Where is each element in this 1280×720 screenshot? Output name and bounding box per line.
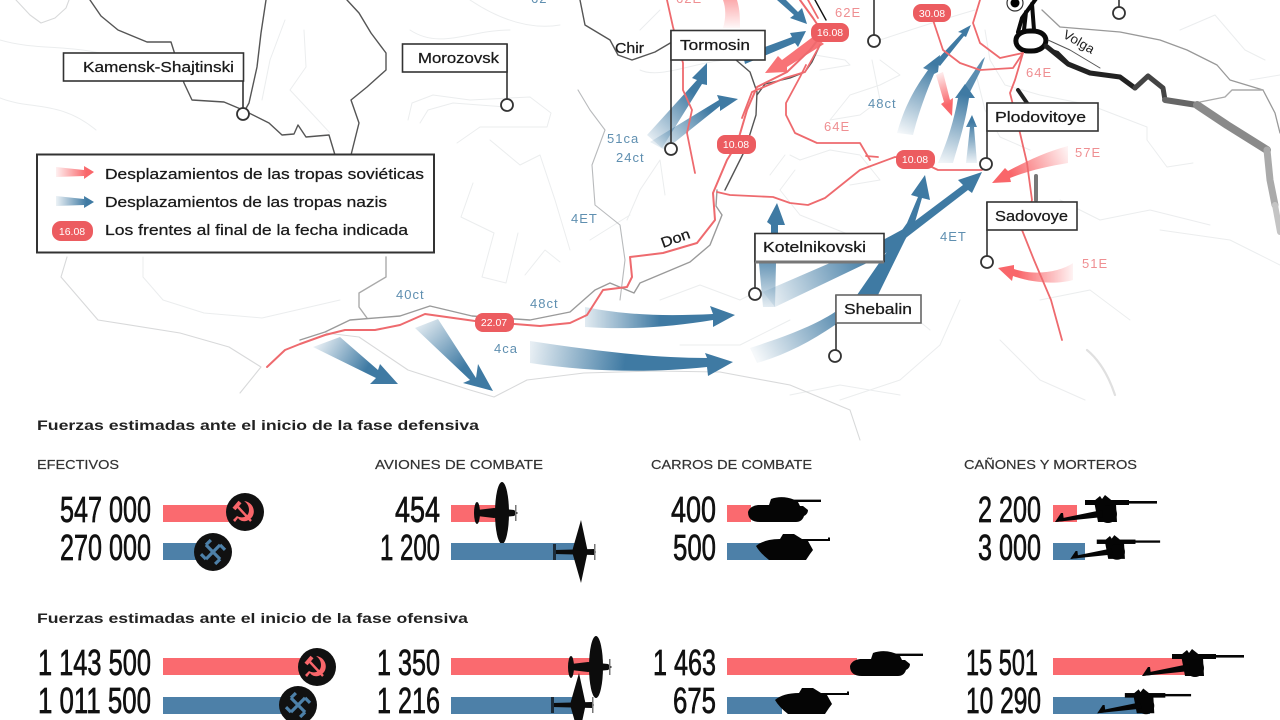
river name: Volga: Volga [1060, 27, 1098, 57]
unit labels: 48ct [530, 296, 559, 311]
city: Kotelnikovski: Kotelnikovski [763, 240, 866, 256]
city: Plodovitoye: Plodovitoye [995, 110, 1086, 126]
aircraft bars [377, 636, 612, 720]
legend badge [52, 221, 93, 241]
tank bars: 400 [671, 489, 716, 530]
legend badge: 16.08 [59, 226, 85, 238]
heading: Fuerzas estimadas ante el inicio de la fase ofensiva [37, 610, 468, 626]
city markers [64, 0, 1125, 362]
unit labels: 51E [1082, 256, 1108, 271]
arrow: from Shebalin forking north [750, 175, 930, 363]
city: Shebalin: Shebalin [844, 302, 912, 318]
city: Kamensk-Shajtinski [64, 53, 249, 120]
personnel bars [38, 642, 336, 720]
unit labels: 51ca [607, 131, 639, 146]
arrow: centre north [938, 84, 975, 163]
arrow: to 16.08 lower [743, 31, 806, 64]
city: Sadovoye [981, 202, 1077, 268]
aircraft bars: 1 200 [380, 527, 440, 568]
personnel bars: 547 000 [60, 489, 151, 530]
legend arrow: soviet [56, 166, 94, 179]
section: defensive phase [37, 417, 1160, 583]
artillery bars [966, 642, 1244, 720]
heading: Fuerzas estimadas ante el inicio de la fase defensiva [37, 417, 479, 433]
unit labels: 4ca [494, 341, 518, 356]
badge 10.08 [896, 150, 935, 169]
column title: AVIONES DE COMBATE [375, 457, 543, 472]
soviet troop arrows [723, 0, 1073, 283]
personnel bars: 1 143 500 [38, 642, 151, 683]
unit labels: 4ET [940, 229, 967, 244]
fronts [267, 0, 1062, 367]
map [0, 0, 1280, 440]
artillery bars: 2 200 [978, 489, 1041, 530]
unit labels: 64E [1026, 65, 1052, 80]
unit labels: 40ct [396, 287, 425, 302]
artillery bars: 3 000 [978, 527, 1041, 568]
artillery bars [978, 489, 1160, 568]
city: Sadovoye: Sadovoye [995, 209, 1068, 225]
column title: CAÑONES Y MORTEROS [964, 457, 1137, 472]
badge 16.08: 16.08 [817, 27, 843, 39]
arrow: short north [966, 115, 977, 163]
tank bars [671, 489, 830, 568]
front date badges [475, 4, 951, 332]
city: Kotelnikovski [749, 233, 884, 300]
unit labels: 48ct [868, 96, 897, 111]
arrow: 24ct east [650, 95, 738, 150]
Stalingrad marker [1007, 0, 1023, 11]
arrow: 48ct [585, 306, 735, 328]
section: offensive phase [37, 610, 1244, 720]
aircraft bars [380, 482, 596, 583]
unit labels [396, 0, 1108, 356]
legend: Los frentes al final de la fecha indicada [105, 223, 409, 239]
badge 10.08 [717, 135, 756, 154]
personnel bars: 270 000 [60, 527, 151, 568]
city: Morozovsk [402, 44, 513, 111]
city: Kamensk-Shajtinski: Kamensk-Shajtinski [83, 60, 234, 76]
tank bars: 500 [673, 527, 716, 568]
artillery bars: 15 501 [966, 642, 1038, 683]
tank bars: 1 463 [653, 642, 716, 683]
badge 30.08 [913, 4, 951, 22]
river name: Chir: Chir [615, 41, 644, 57]
aircraft bars: 1 350 [377, 642, 440, 683]
legend [37, 154, 434, 252]
badge 16.08 [811, 23, 849, 42]
arrow: from Kotelnikovski eastwards to Plodovitoye [763, 172, 982, 307]
unit labels: 24ct [616, 150, 645, 165]
arrow: red retreat from 16.08 [765, 36, 824, 73]
river name: Don: Don [659, 226, 693, 252]
tank bars [653, 642, 923, 720]
personnel bars [60, 489, 264, 571]
legend: Desplazamientos de las tropas nazis [105, 195, 387, 211]
unit labels: 64E [824, 119, 850, 134]
badge 22.07: 22.07 [481, 317, 507, 329]
badge 10.08: 10.08 [902, 154, 928, 166]
city: Shebalin [829, 295, 921, 362]
unit labels: 57E [1075, 145, 1101, 160]
artillery bars: 10 290 [966, 680, 1041, 720]
arrow: 40ct east [415, 319, 493, 391]
arrow: 40ct west [313, 337, 398, 384]
city: Plodovitoye [980, 103, 1098, 170]
legend arrow: nazi [56, 196, 94, 208]
arrow: 51ca north [647, 63, 707, 148]
badge 30.08: 30.08 [919, 8, 945, 20]
aircraft bars: 454 [395, 489, 440, 530]
unnamed city [1113, 0, 1125, 19]
personnel bars: 1 011 500 [38, 680, 151, 720]
arrow: red south [936, 72, 953, 116]
column title: EFECTIVOS [37, 457, 119, 472]
arrow: red top [723, 0, 740, 28]
badge 10.08: 10.08 [723, 139, 749, 151]
unit labels: 62E [835, 5, 861, 20]
terrain contours [0, 0, 1280, 440]
arrow: from Kotelnikovski north [759, 203, 785, 307]
arrow: 48ct north [897, 55, 940, 135]
city: Tormosin: Tormosin [680, 38, 750, 54]
column title: CARROS DE COMBATE [651, 457, 812, 472]
tank bars: 675 [673, 680, 716, 720]
city: Tormosin [665, 30, 765, 155]
unit labels: 4ET [571, 211, 598, 226]
rivers [90, 0, 1280, 340]
arrow: to 16.08 upper [777, 0, 807, 24]
badge 22.07 [475, 313, 514, 332]
arrow: 51E [998, 263, 1073, 283]
arrow: 57E [992, 146, 1068, 183]
city: Morozovsk: Morozovsk [418, 51, 500, 67]
arrow: 4ca [530, 341, 733, 376]
legend: Desplazamientos de las tropas soviéticas [105, 167, 424, 183]
unnamed city [868, 0, 880, 47]
Volga [1016, 0, 1280, 232]
aircraft bars: 1 216 [377, 680, 440, 720]
nazi troop arrows [313, 0, 985, 391]
